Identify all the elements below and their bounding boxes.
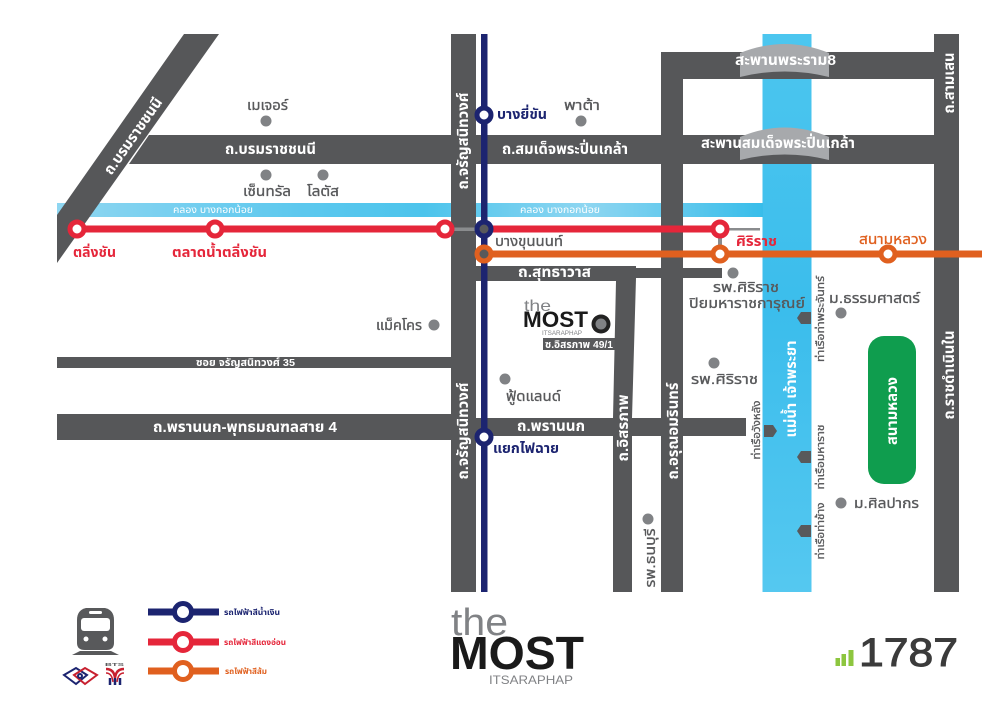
icon: train [72, 608, 119, 655]
logo: the MOST Itsaraphap: ITSARAPHAP [489, 673, 573, 687]
road: Phran Nok-Phutthamonthon Sai 4 [57, 414, 451, 440]
road network [57, 34, 959, 592]
label: Foodland: ฟู้ดแลนด์ [506, 388, 561, 405]
road: Rama 8 bridge road [661, 52, 934, 79]
project marker logo [523, 298, 589, 337]
label: Pata: พาต้า [564, 97, 600, 113]
label: Itsaraphap road: ถ.อิสรภาพ [615, 394, 632, 462]
pier labels [750, 275, 827, 560]
road: diagonal Borommaratchachonnani [57, 34, 219, 263]
canal: Bangkok Noi [57, 203, 763, 217]
label: Bang Khun Non: บางขุนนนท์ [495, 233, 563, 250]
road: Borommaratchachonnani east-west [129, 135, 934, 164]
legend: blue line: รถไฟฟ้าสีน้ำเงิน [224, 606, 280, 617]
label: Central: เซ็นทรัล [243, 183, 291, 199]
label: Arun Amarin road: ถ.อรุณอมรินทร์ [665, 382, 682, 480]
logo: 1787: 1787 [859, 631, 958, 675]
legend [148, 604, 286, 680]
label: Wang Lang: ท่าเรือวังหลัง [750, 400, 763, 460]
bridge: Somdet Phra Pinklao [740, 128, 829, 160]
label: Tha Phra Chan: ท่าเรือท่าพระจันทร์ [814, 275, 827, 362]
label: Lotus: โลตัส [307, 183, 339, 199]
label: Charansanitwong north: ถ.จรัญสนิทวงศ์ [455, 92, 472, 190]
station: Yaek Fai Chai [477, 430, 491, 444]
label: Samsen road: ถ.สามเสน [941, 52, 958, 114]
label: Yaek Fai Chai: แยกไฟฉาย [493, 440, 559, 456]
label: Bang Yi Khan: บางยี่ขัน [497, 104, 547, 122]
label: Phran Nok road: ถ.พรานนก [517, 418, 585, 435]
project marker [592, 314, 610, 334]
label: Taling Chan: ตลิ่งชัน [73, 243, 116, 260]
station: Bang Yi Khan [477, 108, 491, 122]
road: Phran Nok [476, 418, 746, 436]
label: Silpakorn: ม.ศิลปากร [854, 495, 919, 511]
road: Charansanitwong [451, 34, 476, 592]
label: Thonburi hospital: รพ.ธนบุรี [642, 528, 659, 588]
label: Tha Chang: ท่าเรือท่าช้าง [814, 502, 827, 560]
label: Siriraj: ศิริราช [736, 233, 777, 249]
orange line [484, 250, 982, 258]
logo: the MOST Itsaraphap: the [451, 602, 508, 644]
icon: BTS logo: BTS [105, 662, 124, 667]
label: Soi 35: ซอย จรัญสนิทวงศ์ 35 [196, 357, 295, 369]
canal label east: คลอง บางกอกน้อย [520, 204, 600, 216]
logo: the MOST Itsaraphap [450, 602, 584, 687]
legend: red line: รถไฟฟ้าสีแดงอ่อน [224, 636, 286, 647]
blue line [481, 34, 488, 592]
station: Taling Chan [70, 222, 84, 236]
label: Piyamaharajkarun: ปิยมหาราชการุณย์ [688, 295, 805, 312]
station: Bang Khun Non orange [477, 247, 491, 261]
label: Siriraj hospital: รพ.ศิริราช [691, 371, 758, 387]
landmark dots [260, 116, 846, 524]
label: Taling Chan market: ตลาดน้ำตลิ่งชัน [172, 242, 267, 260]
station: red line Charan [438, 222, 452, 236]
station labels [73, 104, 927, 456]
label: Makro: แม็คโคร [376, 317, 422, 333]
label: Suthawat road: ถ.สุทธาวาส [518, 264, 591, 281]
road: Arun Amarin [661, 52, 683, 592]
road: Samsen / Ratchadamnoen [934, 34, 959, 592]
station: Siriraj red [713, 222, 727, 236]
label: Sanam Luang: สนามหลวง [884, 377, 901, 445]
label: Ratchadamnoen Nai: ถ.ราชดำเนินใน [941, 330, 958, 420]
project marker logo: MOST [523, 307, 589, 332]
pier markers [764, 312, 811, 537]
station: Bang Khun Non blue [477, 222, 491, 236]
label: Maharaj: ท่าเรือมหาราช [814, 424, 827, 490]
label: Pinklao bridge: สะพานสมเด็จพระปิ่นเกล้า [701, 133, 855, 152]
project soi label: ซ.อิสรภาพ 49/1 [545, 339, 613, 351]
station: Sanam Luang [881, 247, 895, 261]
label: Sanam Luang station: สนามหลวง [859, 231, 927, 247]
logo: the MOST Itsaraphap: MOST [450, 627, 584, 679]
label: Phran Nok-Phutthamonthon: ถ.พรานนก-พุทธมณฑลสาย 4 [153, 419, 338, 436]
red line east section [484, 226, 720, 232]
label: diagonal road: ถ.บรมราชชนนี [101, 95, 166, 178]
label: Rama 8 bridge: สะพานพระราม8 [735, 52, 836, 69]
label: Somdet Phra Pinklao road: ถ.สมเด็จพระปิ่นเกล้า [502, 139, 628, 158]
canal label west: คลอง บางกอกน้อย [173, 204, 253, 216]
label: Thammasat: ม.ธรรมศาสตร์ [829, 290, 921, 306]
road labels [101, 52, 958, 480]
icon: BTS logo [105, 662, 124, 685]
station: Taling Chan floating market [208, 222, 222, 236]
legend: orange line: รถไฟฟ้าสีส้ม [225, 666, 267, 676]
project marker logo: ITSARAPHAP [542, 331, 582, 337]
river label: แม่น้ำ เจ้าพระยา [780, 340, 800, 438]
stations [70, 108, 895, 444]
project marker logo: the [524, 298, 551, 315]
label: Major: เมเจอร์ [247, 97, 289, 113]
road: Suthawat [476, 266, 722, 592]
river: Chao Phraya [762, 34, 812, 592]
label: Borommaratchachonnani: ถ.บรมราชชนนี [225, 141, 316, 158]
connector: walkway links [445, 228, 760, 254]
landmark labels [243, 97, 921, 588]
bridge: Rama 8 [740, 44, 829, 77]
label: Siriraj Piyamaharajkarun: รพ.ศิริราช [713, 279, 779, 295]
road: Soi Charansanitwong 35 [57, 357, 451, 368]
station: Siriraj orange [713, 247, 727, 261]
label: Charansanitwong south: ถ.จรัญสนิทวงศ์ [455, 382, 472, 480]
Sanam Luang green [868, 336, 916, 484]
icon: MRT logo [64, 668, 97, 684]
red line west section [77, 226, 445, 232]
